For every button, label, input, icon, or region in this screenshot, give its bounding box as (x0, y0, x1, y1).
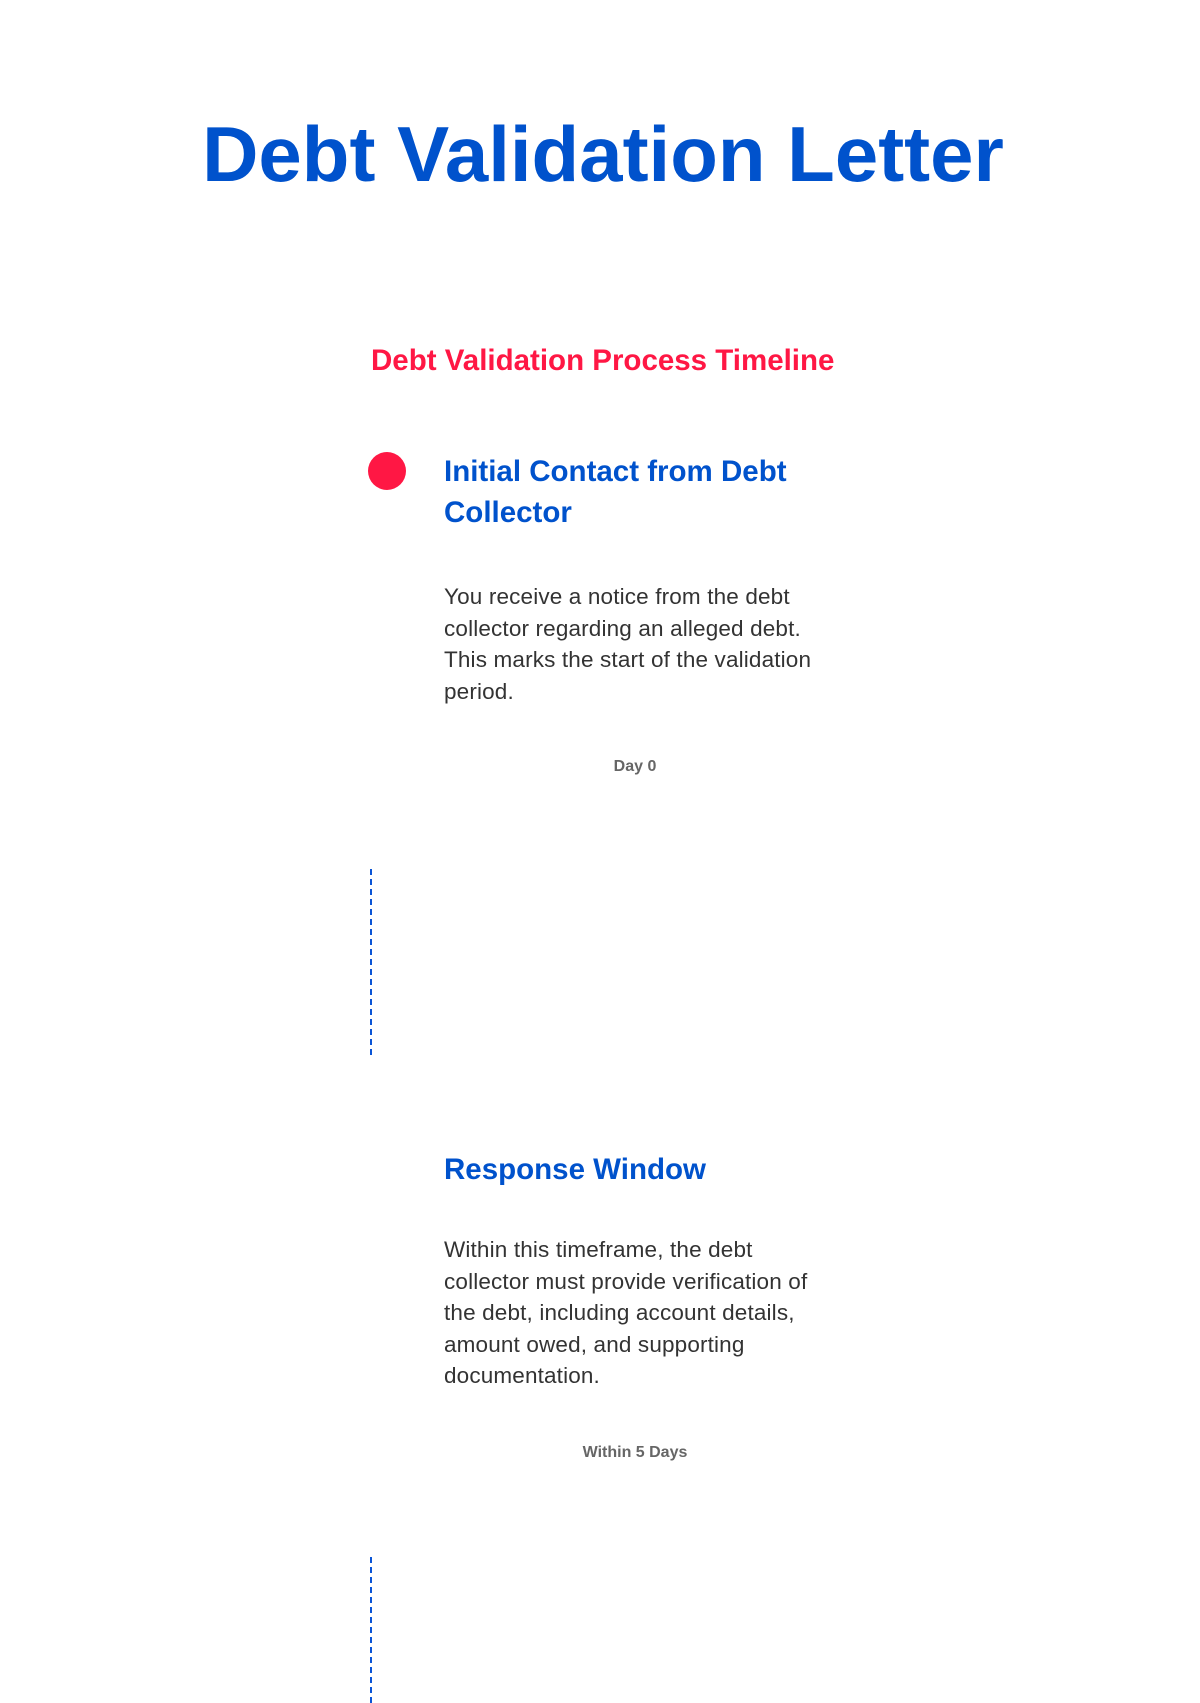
step 1 heading (444, 455, 787, 529)
connector: dashed line 1 (370, 869, 372, 1055)
step 1 description: This marks the start of the validation (444, 647, 811, 672)
step 1: initial contact (368, 452, 811, 775)
step 1 description: You receive a notice from the debt (444, 584, 790, 609)
step 2 time label: Within 5 Days (583, 1444, 687, 1461)
step 1 description (444, 584, 811, 704)
step 1 description: period. (444, 679, 514, 704)
step 1 time label: Day 0 (614, 758, 656, 775)
step 2: response window (444, 1153, 808, 1461)
connector: dashed line 2 (370, 1557, 372, 1703)
step 1 heading: Collector (444, 496, 572, 529)
step 2 description (444, 1237, 808, 1388)
step 2 description: Within this timeframe, the debt (444, 1237, 753, 1262)
step 2 description: amount owed, and supporting (444, 1332, 745, 1357)
icon: red timeline dot (368, 452, 406, 490)
step 1 description: collector regarding an alleged debt. (444, 616, 801, 641)
subtitle: timeline heading: Debt Validation Process Timeline (371, 344, 834, 377)
title: Debt Validation Letter (202, 110, 1004, 198)
step 2 description: the debt, including account details, (444, 1300, 795, 1325)
step 1 heading: Initial Contact from Debt (444, 455, 787, 488)
step 2 heading: Response Window (444, 1153, 706, 1186)
step 2 description: documentation. (444, 1363, 600, 1388)
step 2 description: collector must provide verification of (444, 1269, 807, 1294)
